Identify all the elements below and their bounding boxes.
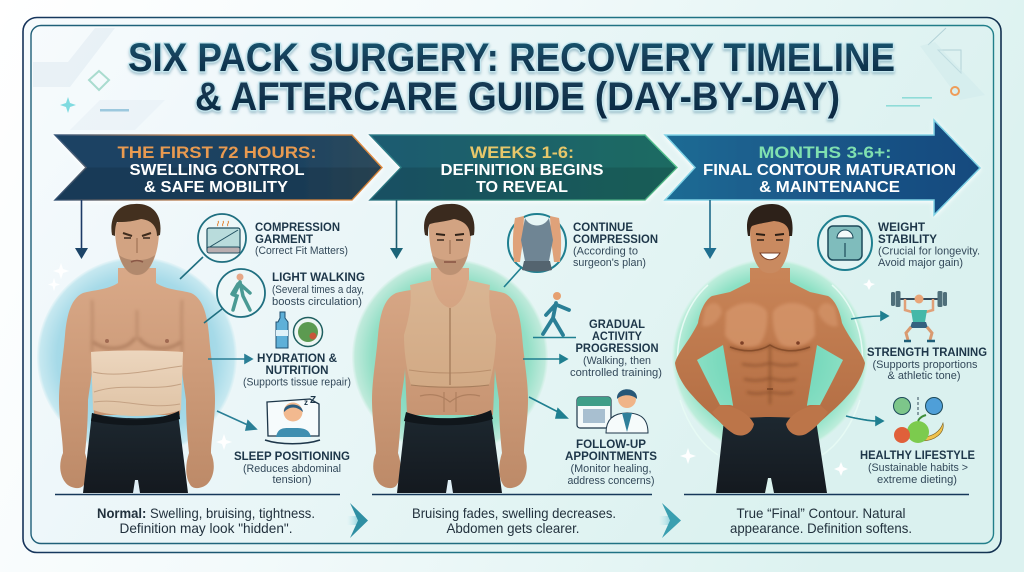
icon: sleep positioning: z bbox=[304, 398, 308, 407]
decorative shapes, top right bbox=[886, 28, 985, 107]
label: strength training: STRENGTH TRAINING bbox=[867, 345, 987, 359]
label: sleep positioning: SLEEP POSITIONING bbox=[234, 449, 350, 463]
shorts bbox=[397, 411, 502, 493]
icon: compression garment bbox=[180, 214, 246, 279]
label: compression garment: (Correct Fit Matters) bbox=[255, 245, 348, 257]
banner arrow 1 bbox=[55, 135, 382, 200]
label: strength training: & athletic tone) bbox=[888, 370, 960, 382]
decorative shapes, top left bbox=[33, 28, 165, 130]
shorts bbox=[83, 413, 188, 493]
arrow to lifestyle bbox=[846, 416, 883, 425]
label: light walking: boosts circulation) bbox=[272, 296, 362, 308]
label: sleep positioning bbox=[234, 449, 350, 486]
hair bbox=[747, 204, 793, 236]
arms and torso bbox=[59, 268, 215, 488]
icon: light walking bbox=[204, 269, 265, 323]
hair bbox=[424, 204, 474, 236]
label: light walking: (Several times a day, bbox=[272, 284, 364, 296]
label: hydration and nutrition: NUTRITION bbox=[266, 363, 328, 377]
label: gradual activity progression bbox=[570, 317, 662, 379]
label: healthy lifestyle: HEALTHY LIFESTYLE bbox=[860, 448, 975, 462]
note: first 72 hours: Definition may look "hidden". bbox=[120, 520, 292, 536]
label: gradual activity progression: (Walking, then bbox=[583, 355, 651, 367]
down arrow 1 bbox=[75, 200, 88, 259]
neck and face bbox=[429, 218, 471, 275]
chest highlights bbox=[725, 303, 767, 347]
glow circle 1 bbox=[37, 257, 237, 457]
banner arrow 2 bbox=[370, 135, 677, 200]
note: months 3-6+ bbox=[730, 505, 912, 536]
label: strength training bbox=[867, 345, 987, 382]
glow circle 3 bbox=[672, 259, 868, 455]
icon: barbell lifter bbox=[891, 291, 947, 341]
shorts bbox=[716, 417, 827, 493]
title: & AFTERCARE GUIDE (DAY-BY-DAY) bbox=[195, 75, 840, 119]
label: weight stability bbox=[878, 220, 980, 269]
banner arrow 3: FINAL CONTOUR MATURATION bbox=[703, 162, 956, 179]
body silhouette with arms bbox=[675, 268, 865, 436]
label: strength training: (Supports proportions bbox=[872, 359, 978, 371]
banner arrow 1: THE FIRST 72 HOURS: bbox=[118, 143, 316, 162]
ground lines bbox=[55, 494, 969, 496]
abs bbox=[730, 345, 810, 404]
arms and abdomen bbox=[372, 268, 528, 488]
banner arrow 2: DEFINITION BEGINS bbox=[440, 162, 604, 179]
label: healthy lifestyle: extreme dieting) bbox=[877, 474, 957, 486]
icon: healthy lifestyle bbox=[894, 397, 943, 443]
icon: calendar and doctor bbox=[577, 389, 648, 433]
banner arrow 2: WEEKS 1-6: bbox=[470, 143, 574, 162]
note: weeks 1-6 bbox=[412, 505, 616, 536]
label: follow-up appointments: (Monitor healing, bbox=[570, 463, 652, 475]
note: months 3-6+: appearance. Definition softens. bbox=[730, 520, 912, 536]
label: continue compression: surgeon's plan) bbox=[573, 257, 646, 269]
label: gradual activity progression: ACTIVITY bbox=[592, 329, 642, 343]
smile bbox=[760, 253, 780, 260]
arrow to strength bbox=[851, 312, 888, 320]
label: sleep positioning: (Reduces abdominal bbox=[243, 463, 341, 475]
bandage bbox=[91, 350, 183, 416]
note: weeks 1-6: Abdomen gets clearer. bbox=[446, 520, 580, 536]
down arrow 3 bbox=[704, 200, 716, 259]
label: gradual activity progression: controlled training) bbox=[570, 367, 662, 379]
label: weight stability: Avoid major gain) bbox=[878, 257, 963, 269]
label: healthy lifestyle: (Sustainable habits > bbox=[868, 462, 968, 474]
figure 2: man with compression vest bbox=[372, 204, 528, 493]
icon: walking figure bbox=[533, 292, 576, 338]
icon: continue compression bbox=[504, 214, 566, 287]
figure 1: man with abdominal bandage bbox=[59, 204, 215, 493]
figure 3: muscular man, hands on hips bbox=[675, 204, 865, 493]
banner arrow 3 bbox=[665, 120, 980, 215]
label: continue compression: (According to bbox=[573, 246, 638, 258]
banner arrow 1: & SAFE MOBILITY bbox=[144, 179, 288, 196]
label: weight stability: (Crucial for longevity. bbox=[878, 246, 980, 258]
label: follow-up appointments: address concerns) bbox=[568, 475, 654, 487]
note: first 72 hours: Normal: Swelling, bruising, tightness. bbox=[97, 505, 315, 521]
label: compression garment: GARMENT bbox=[255, 232, 314, 246]
label: continue compression: COMPRESSION bbox=[573, 232, 658, 246]
label: light walking bbox=[272, 270, 365, 308]
label: light walking: LIGHT WALKING bbox=[272, 270, 365, 284]
label: compression garment: COMPRESSION bbox=[255, 220, 340, 234]
icon: weight scale bbox=[818, 216, 872, 270]
neck and face bbox=[115, 218, 159, 275]
arrow to activity bbox=[523, 355, 567, 363]
icon: water bottle and salad bbox=[276, 312, 322, 348]
label: hydration and nutrition bbox=[243, 351, 351, 388]
label: healthy lifestyle bbox=[860, 448, 975, 486]
banner arrow 3: & MAINTENANCE bbox=[759, 179, 900, 196]
banner arrow 3: MONTHS 3-6+: bbox=[758, 143, 892, 162]
hair bbox=[111, 204, 160, 236]
note: months 3-6+: True “Final” Contour. Natural bbox=[736, 505, 906, 521]
face bbox=[750, 218, 790, 273]
icon: sleep positioning bbox=[265, 395, 320, 444]
label: continue compression bbox=[573, 220, 658, 269]
label: follow-up appointments: APPOINTMENTS bbox=[565, 449, 657, 463]
banner arrow 1: SWELLING CONTROL bbox=[130, 162, 305, 179]
chevron divider 1 bbox=[347, 503, 368, 538]
label: follow-up appointments: FOLLOW-UP bbox=[576, 437, 646, 451]
title: SIX PACK SURGERY: RECOVERY TIMELINE bbox=[128, 36, 895, 80]
label: follow-up appointments bbox=[565, 437, 657, 487]
compression vest bbox=[404, 280, 496, 386]
note: weeks 1-6: Bruising fades, swelling decreases. bbox=[412, 505, 616, 521]
title bbox=[128, 36, 895, 119]
banner arrow 2: TO REVEAL bbox=[476, 179, 568, 196]
hands bbox=[712, 405, 754, 436]
label: continue compression: CONTINUE bbox=[573, 220, 633, 234]
arrow to hydration bbox=[208, 355, 252, 363]
note: first 72 hours bbox=[97, 505, 315, 536]
label: gradual activity progression: GRADUAL bbox=[589, 317, 645, 331]
label: weight stability: STABILITY bbox=[878, 232, 937, 246]
label: sleep positioning: tension) bbox=[272, 474, 312, 486]
down arrow 2 bbox=[390, 200, 403, 259]
arrow to sleep bbox=[217, 411, 256, 430]
arrow to follow-up bbox=[529, 397, 567, 418]
label: compression garment bbox=[255, 220, 348, 257]
chevron divider 2 bbox=[659, 503, 681, 538]
glow circle 2 bbox=[352, 259, 548, 455]
label: hydration and nutrition: (Supports tissue repair) bbox=[243, 376, 351, 388]
label: gradual activity progression: PROGRESSION bbox=[576, 341, 658, 355]
label: hydration and nutrition: HYDRATION & bbox=[257, 351, 337, 365]
icon: sleep positioning: Z bbox=[310, 395, 316, 406]
sparkles bbox=[48, 263, 875, 476]
label: weight stability: WEIGHT bbox=[878, 220, 926, 234]
ring accents bbox=[677, 285, 863, 455]
